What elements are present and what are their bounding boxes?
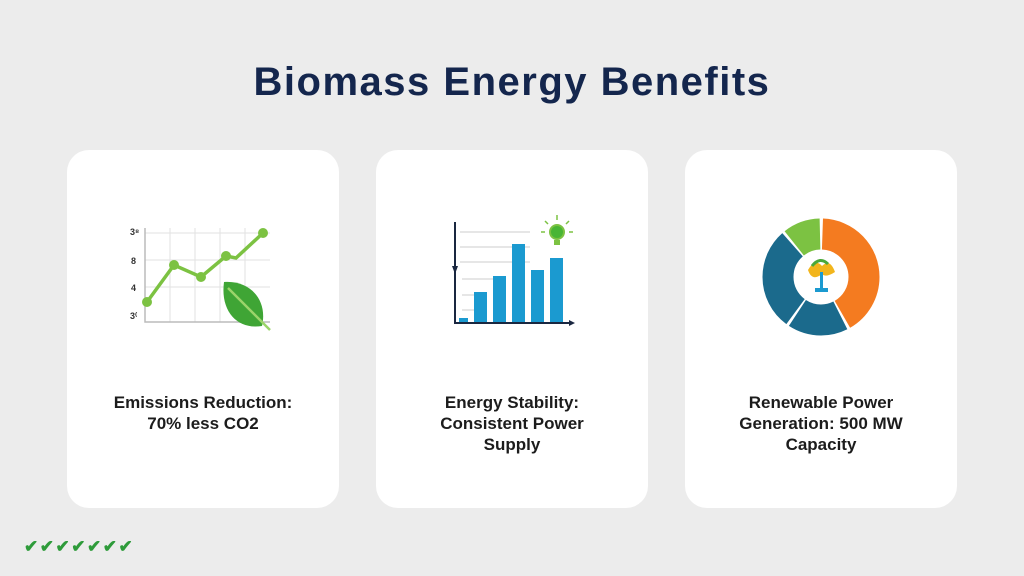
panel: stability bbox=[376, 150, 648, 508]
chart: bar chart with bulb bbox=[452, 215, 575, 326]
chart: line chart with leaf: 8 bbox=[131, 256, 136, 266]
text: emissions caption bbox=[114, 393, 292, 433]
chart: line chart with leaf: 3⁽ bbox=[130, 311, 138, 321]
text: renewable caption: Capacity bbox=[786, 435, 856, 454]
text: stability caption bbox=[440, 393, 584, 454]
text: stability caption: Energy Stability: bbox=[445, 393, 579, 412]
text: emissions caption: Emissions Reduction: bbox=[114, 393, 292, 412]
text: emissions caption: 70% less CO2 bbox=[147, 414, 259, 433]
checkmarks: ✔✔✔✔✔✔✔ bbox=[24, 537, 134, 556]
chart: donut chart bbox=[762, 218, 880, 336]
title: Biomass Energy Benefits bbox=[254, 60, 770, 104]
chart: line chart with leaf: 4 bbox=[131, 283, 136, 293]
text: renewable caption bbox=[739, 393, 903, 454]
text: renewable caption: Generation: 500 MW bbox=[739, 414, 903, 433]
text: renewable caption: Renewable Power bbox=[749, 393, 893, 412]
chart: line chart with leaf: 3⁸ bbox=[130, 227, 139, 237]
text: stability caption: Supply bbox=[484, 435, 540, 454]
panel: emissions bbox=[67, 150, 339, 508]
text: stability caption: Consistent Power bbox=[440, 414, 584, 433]
chart: line chart with leaf bbox=[130, 227, 271, 331]
panel: renewable bbox=[685, 150, 957, 508]
